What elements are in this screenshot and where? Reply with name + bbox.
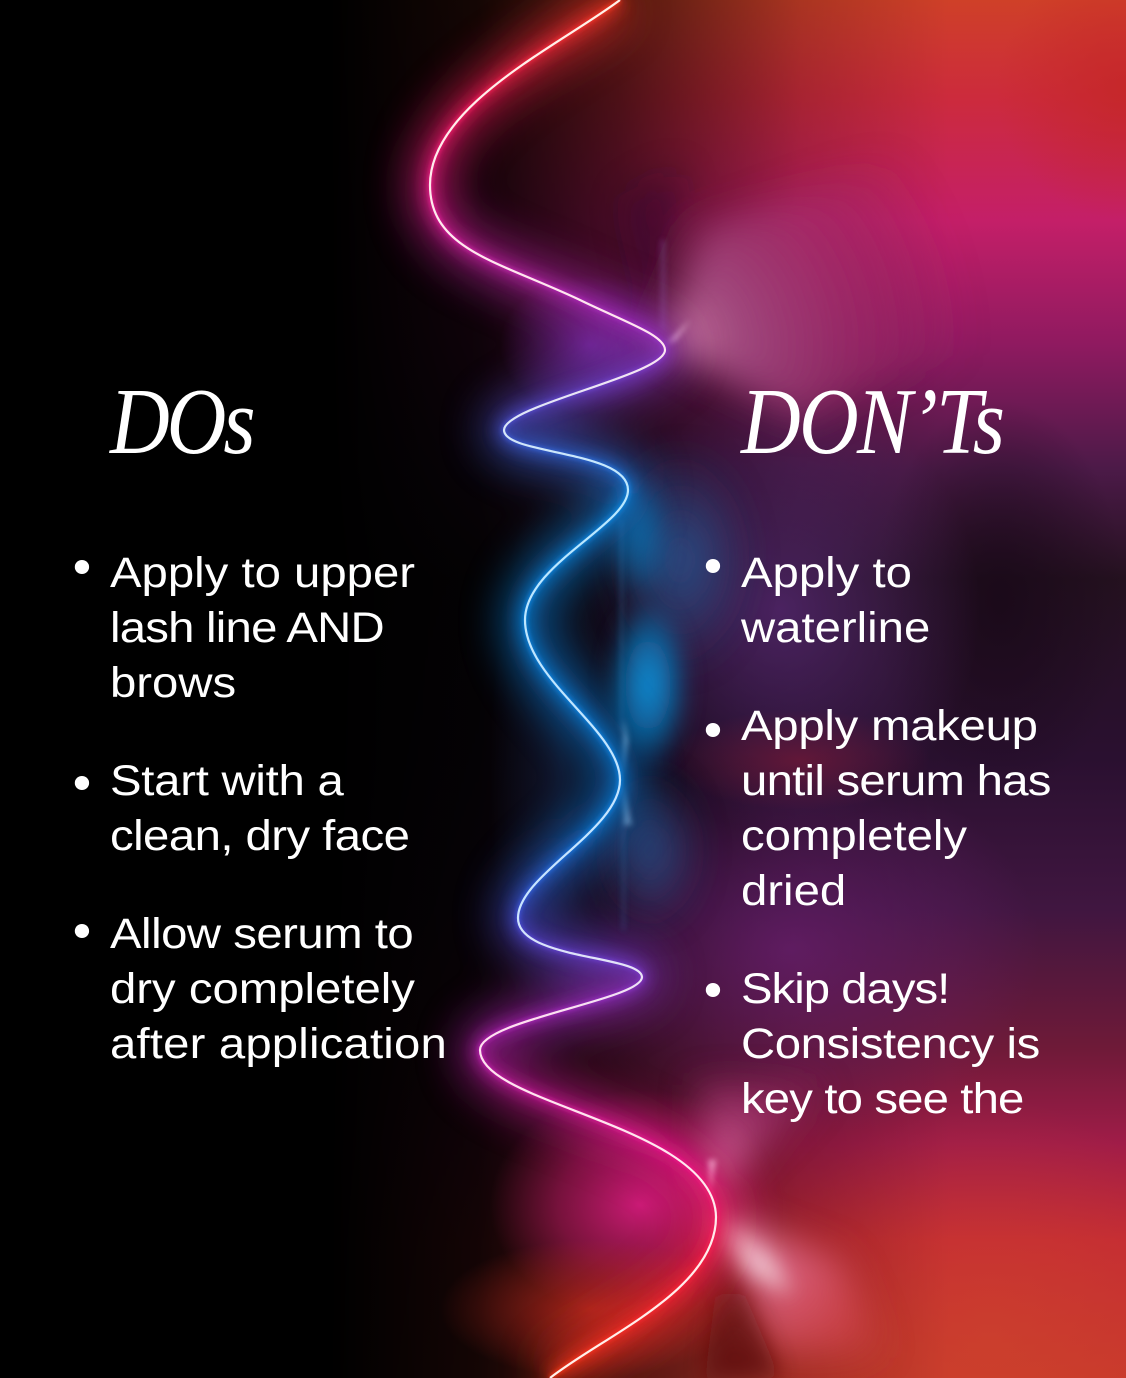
icon: neon wave line: [430, 0, 716, 1378]
bullet: upper lash line: [74, 549, 415, 930]
bullet: allow serum to dry: [74, 910, 447, 1068]
bullet: skip days: key to see the: [741, 1075, 1023, 1123]
bullet: clean dry face: Start with a: [110, 757, 344, 805]
bullet: apply makeup: until serum has: [741, 757, 1051, 805]
heading: DOs: DOs: [110, 370, 252, 474]
bullet: clean dry face: [74, 757, 409, 860]
bullet: upper lash line: lash line AND: [110, 604, 384, 652]
bullet: skip days: Skip days!: [741, 965, 949, 1013]
bullet: apply makeup: completely: [741, 812, 967, 860]
bullet: skip days: Consistency is: [741, 1020, 1040, 1068]
bullet: waterline: Apply to: [741, 549, 912, 597]
bullet: waterline: waterline: [741, 604, 930, 652]
bullet: skip days: [706, 965, 1040, 1123]
bullet: allow serum to dry: after application: [110, 1020, 447, 1068]
bullet: apply makeup: [706, 702, 1051, 915]
heading: DON'Ts: DON’Ts: [741, 370, 1003, 474]
bullet: allow serum to dry: Allow serum to: [110, 910, 413, 958]
bullet: clean dry face: clean, dry face: [110, 812, 409, 860]
bullet: upper lash line: Apply to upper: [110, 549, 415, 597]
bullet: waterline: [706, 549, 930, 652]
bullet: apply makeup: dried: [741, 867, 846, 915]
bullet: apply makeup: Apply makeup: [741, 702, 1038, 750]
bullet: allow serum to dry: dry completely: [110, 965, 415, 1013]
bullet: upper lash line: brows: [110, 659, 236, 707]
light fans around the wave crests: [600, 120, 1010, 1378]
